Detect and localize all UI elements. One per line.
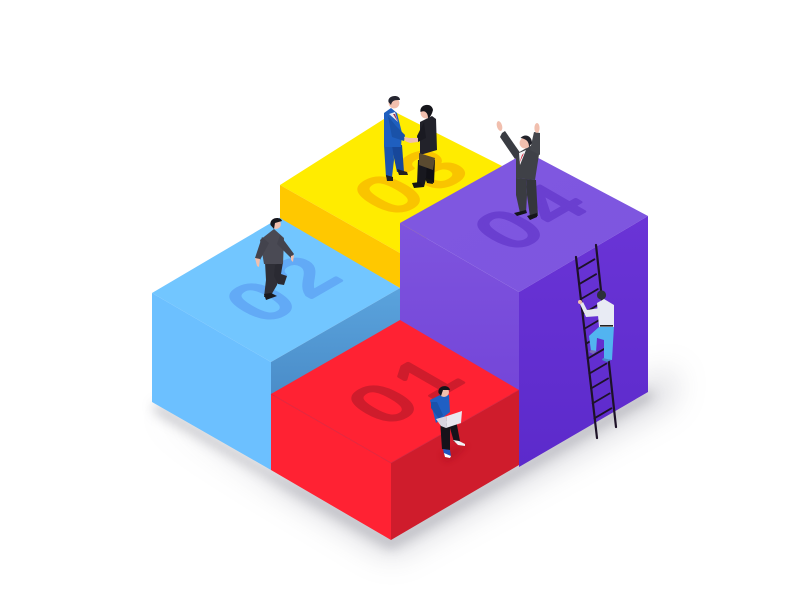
figure: walking businessman [255, 218, 294, 300]
block 01: red [271, 320, 519, 540]
block 03: yellow [280, 112, 510, 288]
figure: two businessmen shaking hands [384, 96, 437, 188]
ground shadow [150, 370, 676, 556]
block 02: blue [152, 217, 400, 470]
number 01: 01 [329, 343, 488, 435]
number 02: 02 [207, 241, 366, 333]
figure: man with laptop sitting on the edge [430, 386, 468, 462]
figure: man climbing the ladder [578, 290, 614, 362]
number 04: 04 [455, 169, 614, 261]
man in blue suit [384, 96, 408, 181]
man in black suit with briefcase [404, 105, 437, 188]
number 03: 03 [335, 134, 494, 226]
block 04: purple [400, 152, 648, 467]
figure: cheering businessman [496, 120, 540, 220]
ladder [576, 245, 616, 438]
